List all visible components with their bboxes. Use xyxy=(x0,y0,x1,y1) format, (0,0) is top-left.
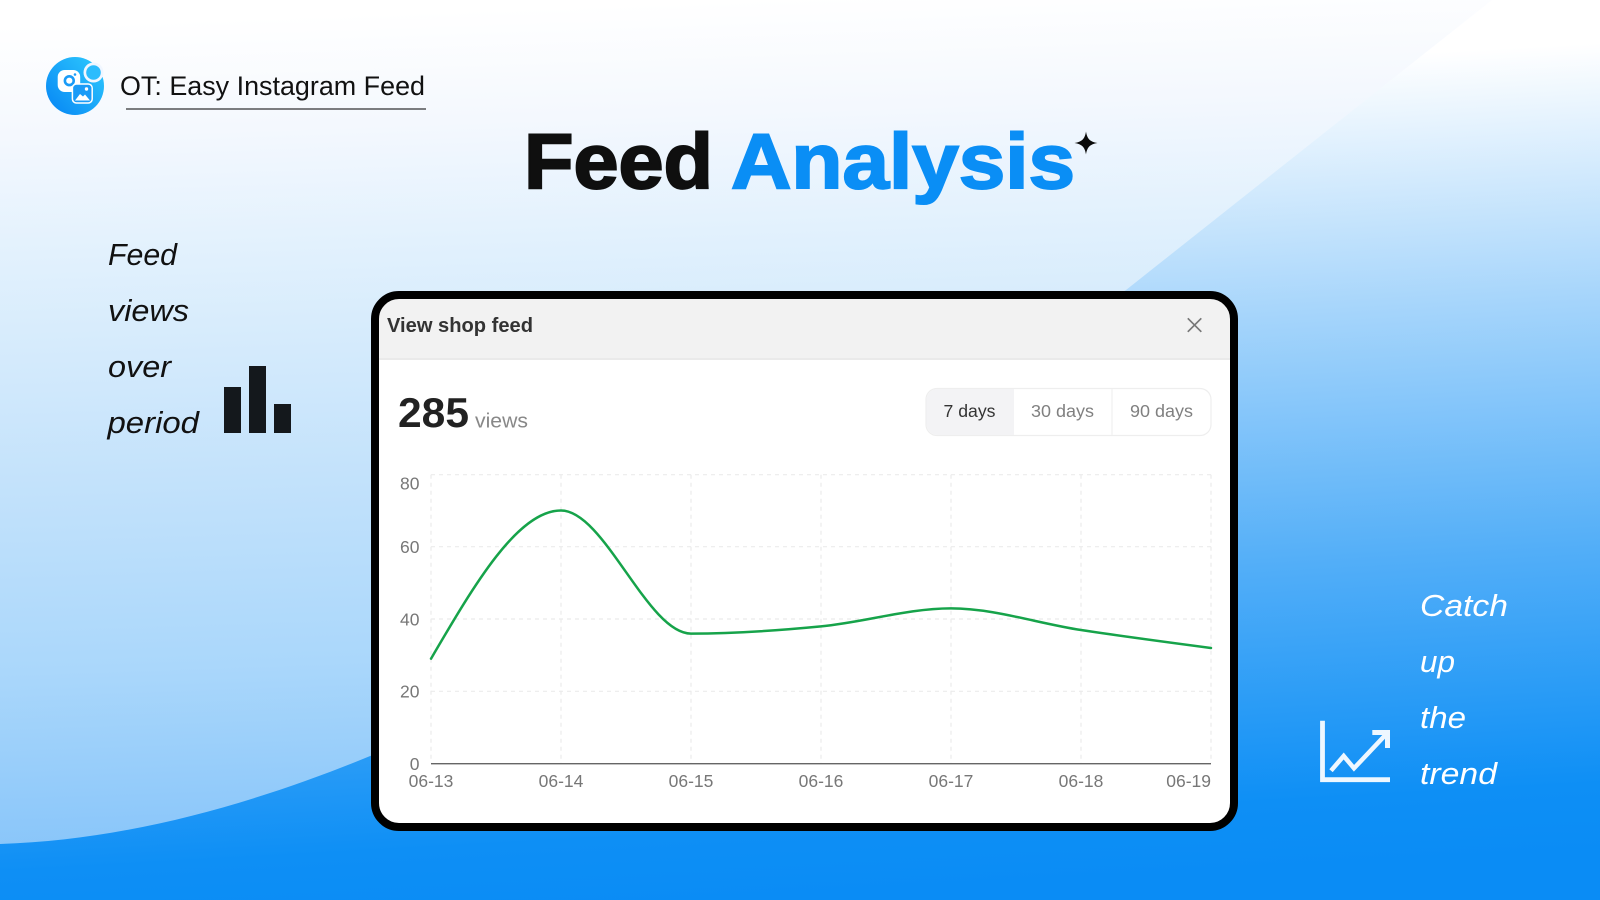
caption line: Feed xyxy=(108,237,179,272)
caption line: over xyxy=(108,349,173,384)
card heading: View shop feed xyxy=(387,315,533,337)
title word: Analysis: Analysis xyxy=(731,117,1075,205)
tab: 30 days: 30 days xyxy=(1031,401,1094,421)
x axis labels xyxy=(409,771,1211,791)
brand name: OT: Easy Instagram Feed xyxy=(120,71,425,101)
brand underline xyxy=(126,108,426,110)
y axis labels xyxy=(400,474,420,774)
icon: trend chart xyxy=(1322,721,1390,780)
line chart xyxy=(400,474,1211,791)
header divider xyxy=(379,358,1230,360)
caption line: up xyxy=(1420,644,1455,679)
x axis labels: 06-15 xyxy=(669,771,713,791)
period selector tabs xyxy=(926,388,1211,436)
x axis labels: 06-13 xyxy=(409,771,453,791)
caption line: Catch xyxy=(1420,588,1508,623)
views number: 285 xyxy=(398,389,469,436)
chart grid xyxy=(431,475,1211,763)
icon: sparkle xyxy=(1074,132,1098,154)
y axis labels: 60 xyxy=(400,537,420,557)
icon: bar chart xyxy=(224,366,291,433)
x axis labels: 06-17 xyxy=(929,771,973,791)
card outline xyxy=(375,295,1234,827)
y axis labels: 80 xyxy=(400,474,420,494)
selected tab background xyxy=(926,389,1014,435)
x axis labels: 06-19 xyxy=(1166,771,1211,791)
y axis labels: 0 xyxy=(410,754,420,774)
caption line: the xyxy=(1420,700,1466,735)
tab: 90 days: 90 days xyxy=(1130,401,1193,421)
card header bar xyxy=(379,299,1230,359)
x axis labels: 06-14 xyxy=(539,771,584,791)
tab: 7 days: 7 days xyxy=(944,401,996,421)
x axis labels: 06-18 xyxy=(1059,771,1103,791)
left caption xyxy=(106,237,201,440)
title word: Feed: Feed xyxy=(524,117,713,205)
title xyxy=(524,117,1098,205)
icon: close xyxy=(1188,318,1201,332)
x axis labels: 06-16 xyxy=(799,771,843,791)
feed views line xyxy=(431,510,1211,659)
x axis line xyxy=(431,763,1211,764)
caption line: trend xyxy=(1420,756,1499,791)
right caption xyxy=(1420,588,1508,791)
selector outline xyxy=(926,388,1211,436)
icon: app logo xyxy=(46,57,104,115)
caption line: views xyxy=(108,293,189,328)
y axis labels: 20 xyxy=(400,682,420,702)
views unit: views xyxy=(475,410,528,432)
brand logo and name xyxy=(46,57,426,115)
views total xyxy=(398,389,528,436)
caption line: period xyxy=(106,405,201,440)
tab divider xyxy=(1112,389,1113,435)
y axis labels: 40 xyxy=(400,610,420,630)
panel: view shop feed card xyxy=(375,295,1234,827)
card body xyxy=(375,295,1234,827)
